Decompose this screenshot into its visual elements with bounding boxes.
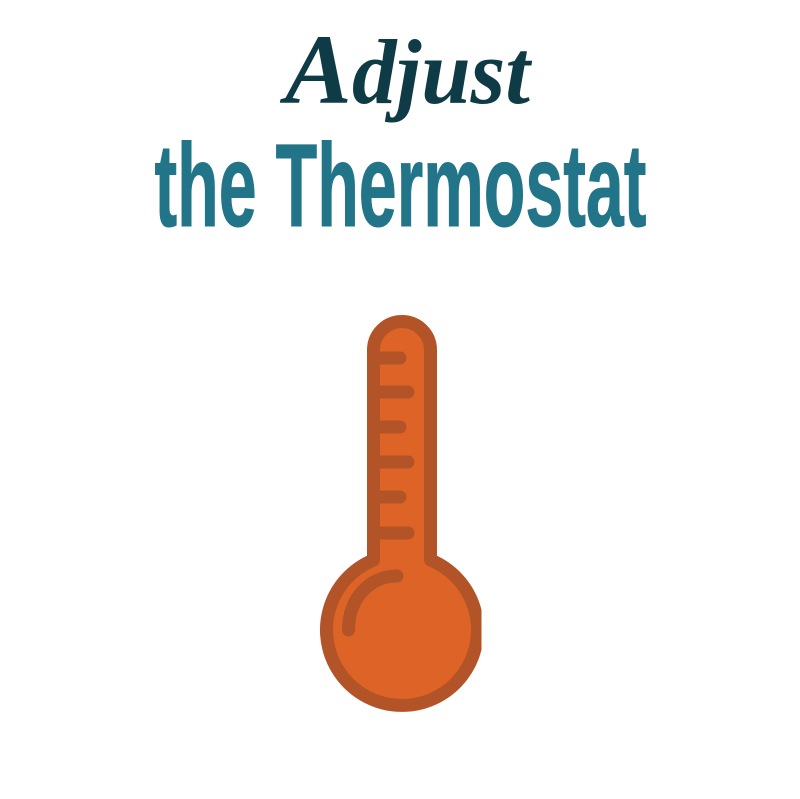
title: script line	[279, 14, 532, 125]
title: script line: A	[279, 14, 352, 125]
temperature tick marks	[376, 358, 408, 533]
icon: thermometer	[327, 322, 478, 705]
title: script line: djust	[352, 21, 532, 123]
infographic canvas	[155, 37, 646, 712]
thermometer body	[327, 322, 478, 705]
bulb highlight	[348, 576, 397, 630]
